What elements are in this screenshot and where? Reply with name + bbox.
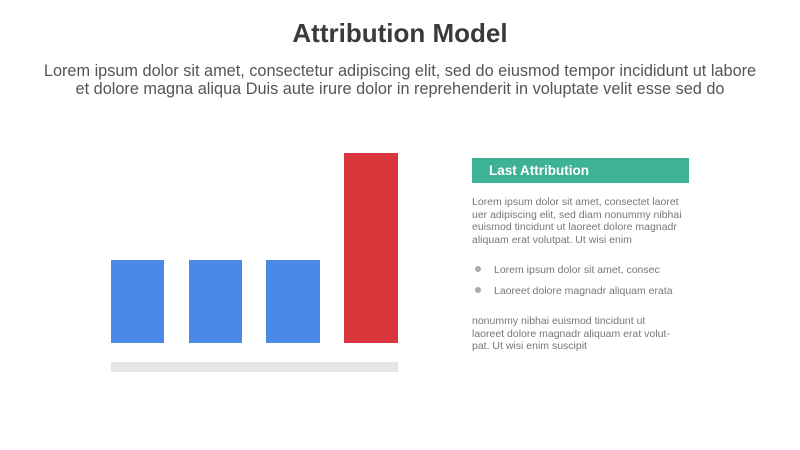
bar 3 xyxy=(266,260,320,343)
paragraph 2 xyxy=(472,315,670,352)
bar chart xyxy=(111,153,398,372)
bar 2 xyxy=(189,260,242,343)
paragraph xyxy=(472,196,682,246)
paragraph: uer adipiscing elit, sed diam nonummy nibhai xyxy=(472,208,682,220)
subtitle xyxy=(44,62,756,98)
paragraph: Lorem ipsum dolor sit amet, consectet laoret xyxy=(472,196,679,208)
panel: last attribution xyxy=(472,158,689,352)
header bar xyxy=(472,158,689,183)
subtitle: Lorem ipsum dolor sit amet, consectetur adipiscing elit, sed do eiusmod tempor incididunt ut labore xyxy=(44,62,756,80)
paragraph 2: laoreet dolore magnadr aliquam erat volut- xyxy=(472,328,670,340)
bullet list xyxy=(475,264,673,297)
paragraph: euismod tincidunt ut laoreet dolore magnadr xyxy=(472,221,677,233)
subtitle: et dolore magna aliqua Duis aute irure dolor in reprehenderit in voluptate velit esse sed do xyxy=(76,80,724,98)
baseline xyxy=(111,362,398,372)
paragraph 2: pat. Ut wisi enim suscipit xyxy=(472,340,587,352)
bullet list: Lorem ipsum dolor sit amet, consec xyxy=(494,264,660,276)
bullet list: Laoreet dolore magnadr aliquam erata xyxy=(494,285,673,297)
paragraph: aliquam erat volutpat. Ut wisi enim xyxy=(472,234,632,246)
paragraph 2: nonummy nibhai euismod tincidunt ut xyxy=(472,315,645,327)
bar 4 xyxy=(344,153,398,343)
title: Attribution Model xyxy=(292,18,508,48)
header bar: Last Attribution xyxy=(489,163,589,178)
bar 1 xyxy=(111,260,164,343)
